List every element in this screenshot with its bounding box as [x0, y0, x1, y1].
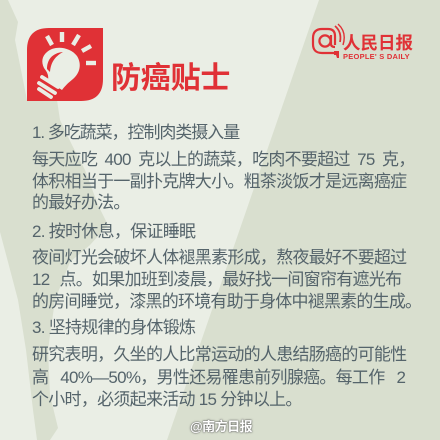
- heading: tip 2: 2. 按时休息，保证睡眠: [32, 222, 195, 241]
- heading: tip 1: 1. 多吃蔬菜，控制肉类摄入量: [32, 123, 239, 142]
- logo name: 人民日报: [343, 33, 413, 53]
- body: tip 1: 的最好办法。: [32, 193, 130, 212]
- watermark: @南方日报: [190, 419, 252, 434]
- logo: People's Daily: [312, 24, 413, 61]
- body: tip 1: [32, 150, 415, 212]
- heading: tip 3: 3. 坚持规律的身体锻炼: [32, 318, 195, 337]
- body: tip 3: 个小时，必须起来活动 15 分钟以上。: [32, 390, 302, 409]
- logo English name: PEOPLE' S DAILY: [343, 52, 410, 61]
- body: tip 2: 夜间灯光会破坏人体褪黑素形成，熬夜最好不要超过: [32, 248, 406, 267]
- body: tip 3: 研究表明，久坐的人比常运动的人患结肠癌的可能性: [32, 345, 406, 364]
- icon: at-sign with signal arcs: [312, 24, 345, 58]
- body: tip 3: [32, 345, 406, 409]
- body: tip 2: 12 点。如果加班到凌晨，最好找一间窗帘有遮光布: [32, 270, 401, 289]
- title: 防癌贴士: [111, 62, 230, 95]
- text block: tips: [32, 123, 421, 409]
- body: tip 2: 的房间睡觉，漆黑的环境有助于身体中褪黑素的生成。: [32, 292, 421, 311]
- body: tip 1: 体积相当于一副扑克牌大小。粗茶淡饭才是远离癌症: [32, 172, 406, 191]
- body: tip 3: 高 40%—50%，男性还易罹患前列腺癌。每工作 2: [32, 368, 405, 387]
- panel: title icon, light bulb: [27, 28, 103, 101]
- body: tip 2: [32, 248, 421, 311]
- body: tip 1: 每天应吃 400 克以上的蔬菜，吃肉不要超过 75 克，: [32, 150, 415, 169]
